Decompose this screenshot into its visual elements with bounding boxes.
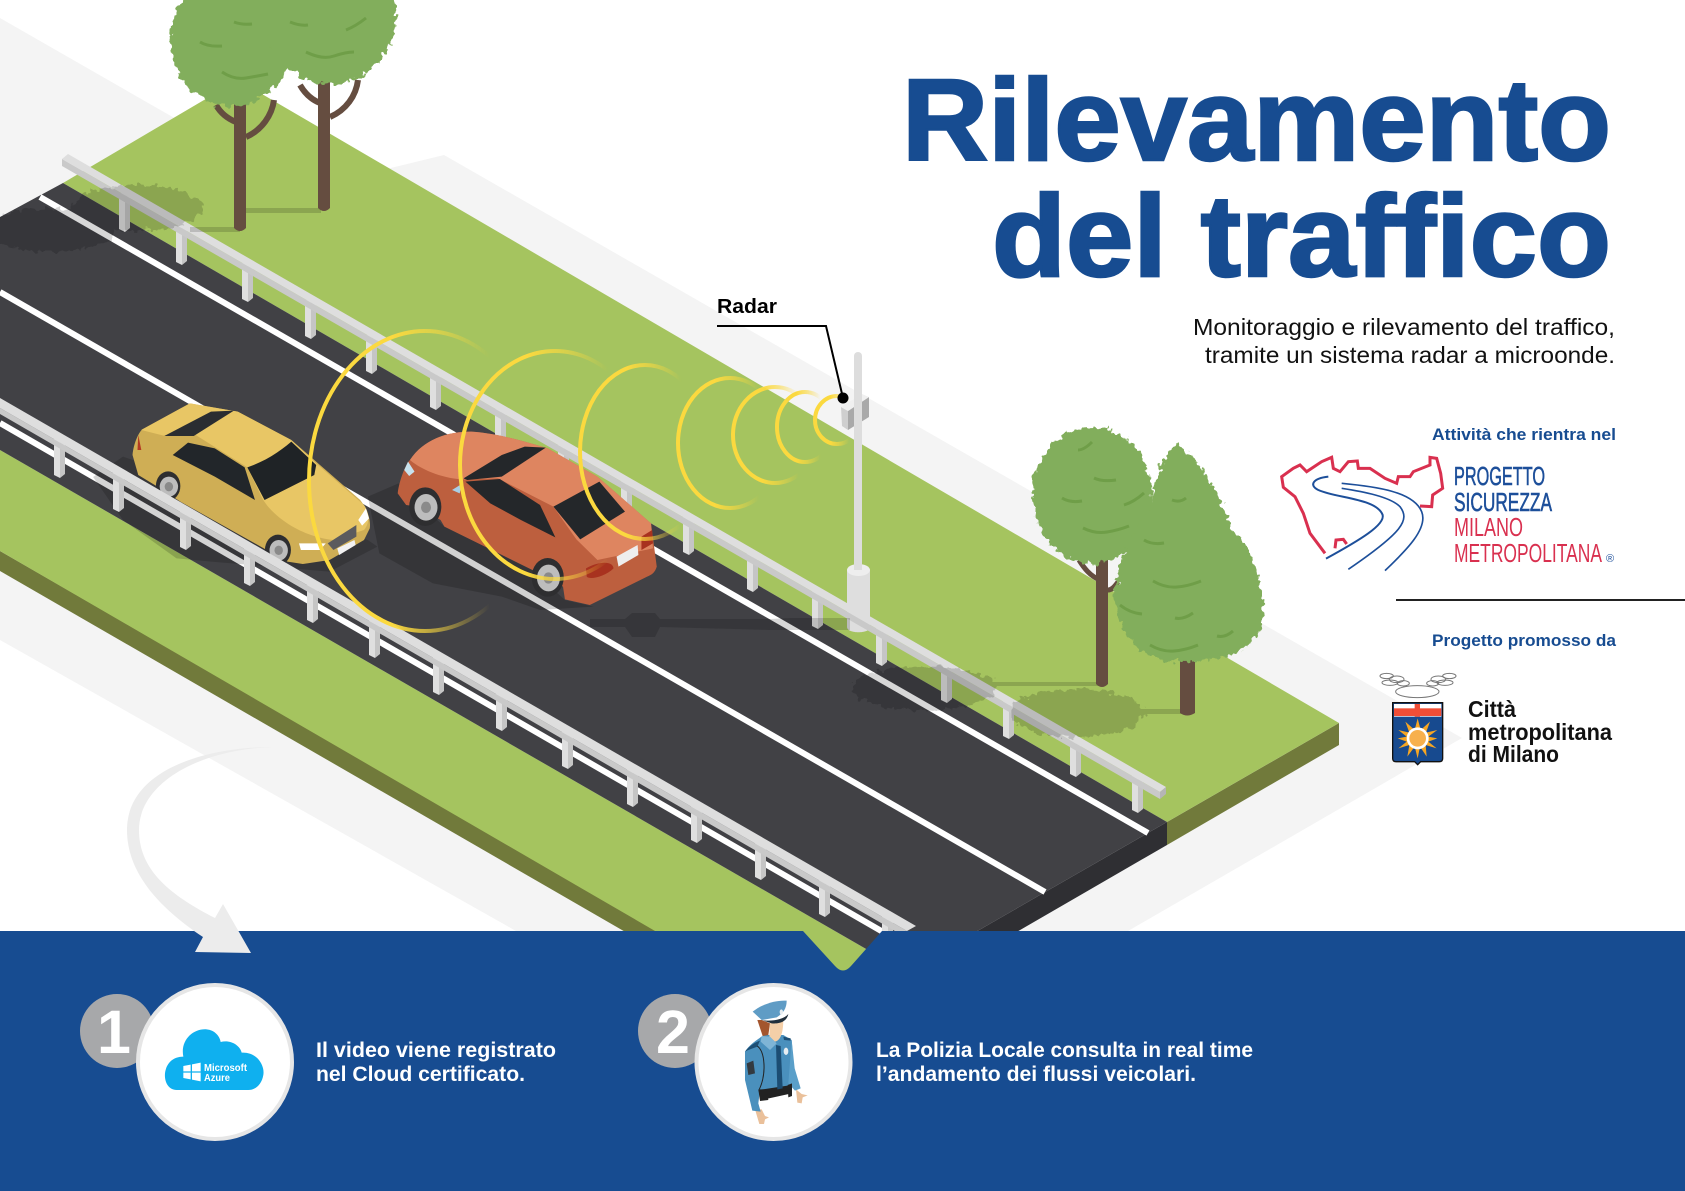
lower guardrail (0, 398, 916, 953)
title: Rilevamento (902, 55, 1611, 185)
icon: officer (745, 1001, 808, 1124)
yellow car (93, 403, 377, 572)
icon: Microsoft Azure cloud: Azure (204, 1073, 230, 1084)
logo: Progetto Sicurezza Milano Metropolitana (1282, 457, 1614, 571)
logo: Progetto Sicurezza Milano Metropolitana: METROPOLITANA (1454, 538, 1602, 568)
step 2 text (876, 1039, 1253, 1086)
logo: Progetto Sicurezza Milano Metropolitana: SICUREZZA (1454, 487, 1552, 517)
radar callout: Radar (717, 296, 777, 318)
step 2 text: l’andamento dei flussi veicolari. (876, 1063, 1196, 1086)
step 1 text: nel Cloud certificato. (316, 1063, 525, 1086)
step 1: cloud: 1 (97, 998, 131, 1066)
step 2 text: La Polizia Locale consulta in real time (876, 1039, 1253, 1062)
subtitle: tramite un sistema radar a microonde. (1205, 342, 1615, 368)
tree shadows (0, 185, 1185, 737)
blue footer panel (0, 931, 1685, 1191)
step 2: police officer (638, 985, 850, 1139)
lane markings (0, 197, 1148, 936)
heading: attività: Attività che rientra nel (1432, 425, 1616, 444)
step 1 text: Il video viene registrato (316, 1039, 556, 1062)
divider (1396, 599, 1685, 601)
logo: Progetto Sicurezza Milano Metropolitana: PROGETTO (1454, 461, 1545, 491)
title (902, 55, 1611, 301)
red car (368, 432, 657, 610)
subtitle (1193, 314, 1615, 368)
light pole (841, 352, 870, 632)
step 1 text (316, 1039, 556, 1086)
radar waves (309, 331, 859, 631)
trees right (1032, 427, 1263, 716)
step 2: police officer: 2 (656, 998, 690, 1066)
logo: Città metropolitana di Milano: Città (1468, 696, 1516, 722)
curved arrow (127, 747, 273, 953)
road platform (0, 80, 1339, 1042)
upper guardrail (62, 154, 1166, 813)
icon: Microsoft Azure cloud (165, 1029, 264, 1090)
logo: Città metropolitana di Milano (1380, 673, 1612, 767)
step 1: cloud (80, 985, 292, 1139)
radar callout (717, 296, 848, 404)
logo: Città metropolitana di Milano: metropolitana (1468, 719, 1612, 745)
trees top left (170, 0, 396, 231)
background isometric shadow (0, 18, 1462, 931)
subtitle: Monitoraggio e rilevamento del traffico, (1193, 314, 1615, 340)
logo: Città metropolitana di Milano: di Milano (1468, 741, 1559, 767)
heading: progetto promosso: Progetto promosso da (1432, 631, 1617, 650)
logo: Progetto Sicurezza Milano Metropolitana: MILANO (1454, 512, 1523, 542)
title: del traffico (992, 171, 1611, 301)
logo: Progetto Sicurezza Milano Metropolitana: ® (1606, 553, 1614, 565)
icon: Microsoft Azure cloud: Microsoft (204, 1063, 248, 1074)
